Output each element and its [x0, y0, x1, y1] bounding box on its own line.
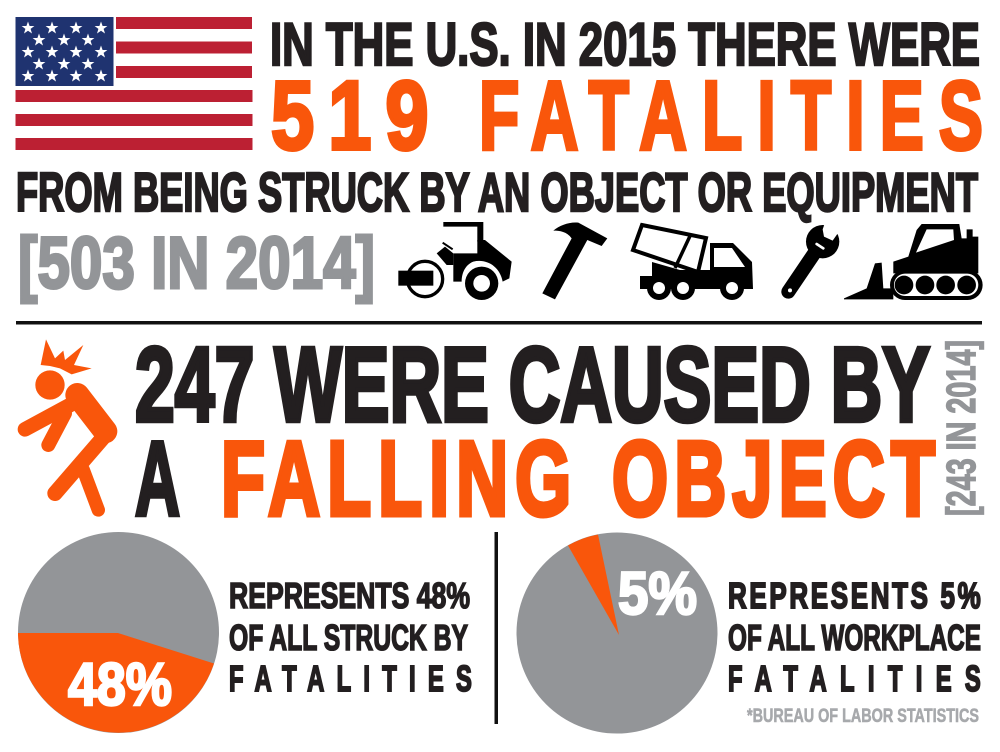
text block: represents 48%: [229, 575, 472, 699]
icon: cement mixer truck: [633, 225, 753, 300]
pie chart: 5%: 5%: [618, 560, 697, 627]
text block: represents 48%: REPRESENTS 48%: [229, 575, 470, 616]
pie chart: 48%: 48%: [68, 651, 172, 718]
icon: US flag: [16, 17, 252, 150]
icon: hammer: [542, 222, 607, 299]
text block: represents 5%: [728, 576, 981, 699]
heading: fatalities: FATALITIES: [479, 61, 983, 170]
text block: represents 48%: FATALITIES: [229, 659, 472, 699]
icon: person struck by falling object: [25, 339, 105, 510]
pie chart: 48%: [18, 532, 219, 733]
heading: falling: FALLING: [221, 420, 571, 538]
icon: road roller: [398, 222, 512, 300]
2014 comparison figure: [503 IN 2014]: [18, 223, 375, 304]
icon: wrench: [788, 220, 843, 292]
heading: object: OBJECT: [612, 420, 935, 538]
2014 falling object comparison: [243 IN 2014]: [938, 340, 984, 516]
icon: skid loader: [844, 224, 983, 300]
text block: represents 5%: REPRESENTS 5%: [728, 576, 981, 616]
text block: represents 48%: OF ALL STRUCK BY: [229, 617, 468, 658]
pie chart: 5%: [516, 532, 718, 734]
heading: 519: 519: [271, 61, 429, 170]
heading: A: A: [135, 420, 180, 538]
text block: represents 5%: FATALITIES: [728, 659, 981, 699]
